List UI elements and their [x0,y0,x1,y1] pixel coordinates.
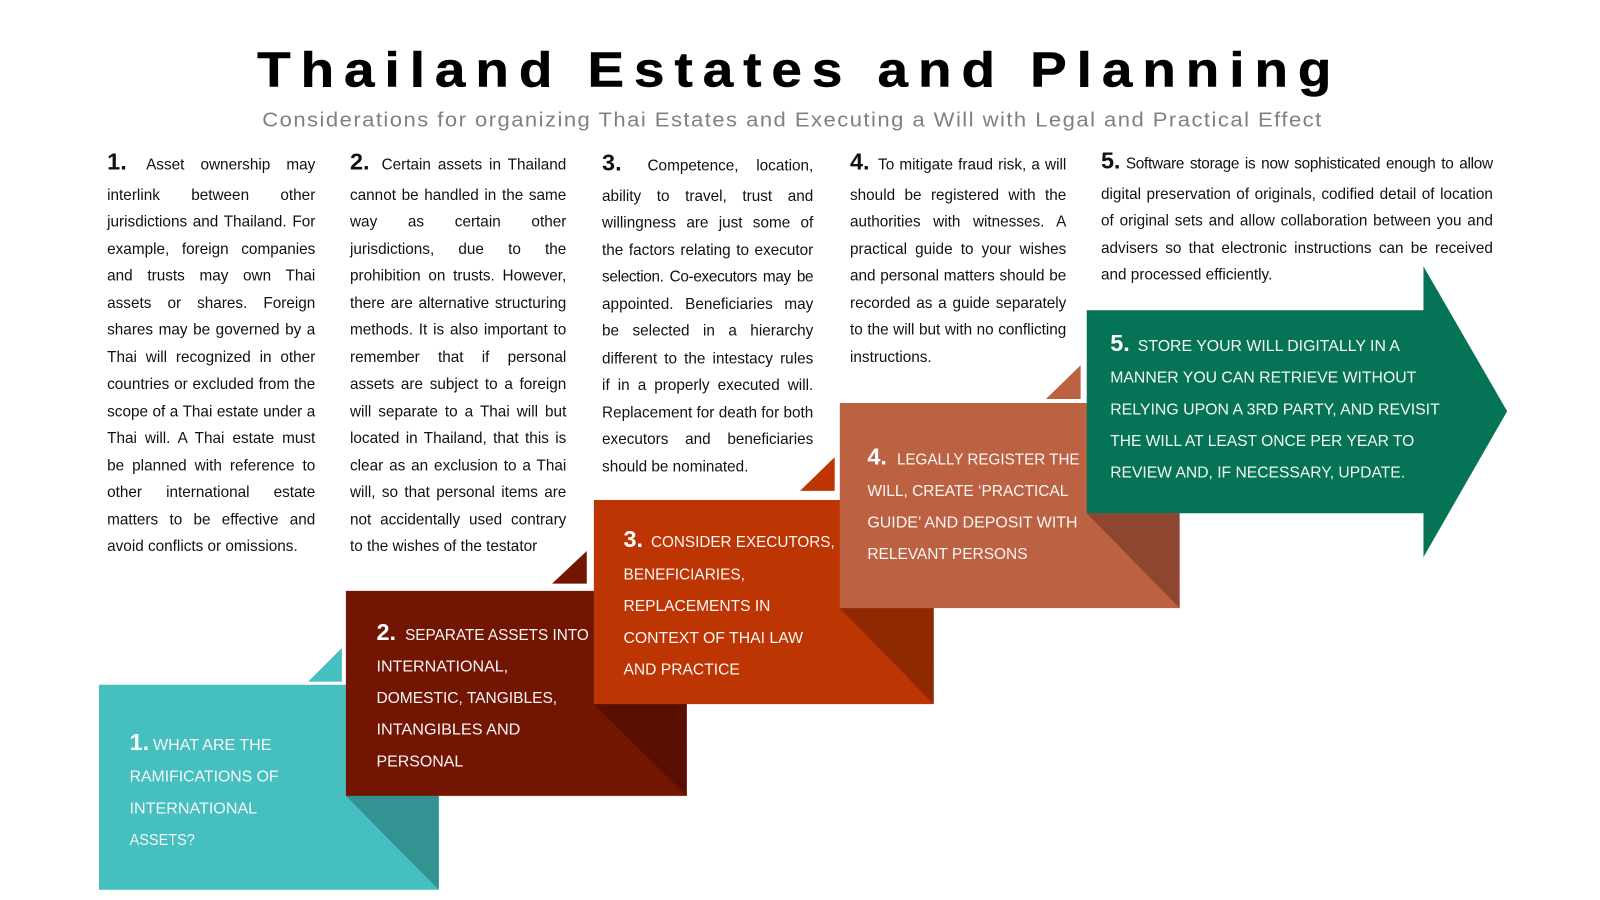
text block: column 3: willingness are just some of [602,214,813,232]
text block: column 1: scope of a Thai estate under a [107,403,315,420]
text block: column 3: selection. Co-executors may be [602,268,813,286]
panel: step 5 arrow: THE WILL AT LEAST ONCE PER YEAR TO [1110,433,1414,450]
text block: column 3: be selected in a hierarchy [602,322,813,340]
panel: step 2 [346,551,687,796]
text block: column 4: authorities with witnesses. A [850,213,1066,231]
text block: column 5: advisers so that electronic instructions can be received [1101,240,1493,257]
panel: step 3: 3. [623,526,643,552]
panel: step 5 arrow: MANNER YOU CAN RETRIEVE WITHOUT [1110,370,1417,387]
text block: column 2 [350,148,566,555]
text block: column 4: instructions. [850,349,932,366]
text block: column 3: appointed. Beneficiaries may [602,296,813,313]
text block: column 4: and personal matters should be [850,267,1066,285]
text block: column 4: recorded as a guide separately [850,295,1066,312]
text block: column 4: should be registered with the [850,187,1066,204]
panel: step 4: 4. [867,443,887,469]
panel: step 2: PERSONAL [377,753,463,770]
text block: column 1: countries or excluded from the [107,376,315,393]
text block: column 4: 4. To mitigate fraud risk, a will [850,148,1066,174]
text block: column 3: ability to travel, trust and [602,188,813,205]
panel: step 1: ASSETS? [130,832,195,849]
text block: column 5: and processed efficiently. [1101,266,1272,284]
text block: column 1: matters to be effective and [107,511,315,529]
text block: column 3: 3. Competence, location, [602,149,813,176]
text block: column 1 [106,148,316,555]
panel: step 2: DOMESTIC, TANGIBLES, [377,690,557,707]
panel: step 4: WILL, CREATE ‘PRACTICAL [867,483,1069,500]
text block: column 2: jurisdictions, due to the [350,241,566,258]
panel: step 5 arrow: RELYING UPON A 3RD PARTY, AND REVISIT [1110,401,1440,418]
panel: step 2: INTANGIBLES AND [377,722,520,739]
text block: column 1: other international estate [107,484,315,501]
panel: step 4 [840,365,1180,608]
panel: step 2: SEPARATE ASSETS INTO [405,627,589,644]
panel: step 4: GUIDE’ AND DEPOSIT WITH [867,515,1078,532]
text block: column 1: 1. Asset ownership may [107,148,315,174]
panel: step 1: RAMIFICATIONS OF [130,769,279,786]
panel: step 3: BENEFICIARIES, [623,567,745,584]
text block: column 5: digital preservation of originals, codified detail of location [1101,186,1493,203]
panel: step 5 arrow: REVIEW AND, IF NECESSARY, UPDATE. [1110,465,1405,482]
panel: step 1: 1. [130,729,149,755]
panel: step 3: CONTEXT OF THAI LAW [623,630,803,647]
text block: column 2: cannot be handled in the same [350,187,566,204]
panel: step 3: REPLACEMENTS IN [623,598,770,615]
text block: column 1: and trusts may own Thai [107,267,315,285]
panel: step 3: AND PRACTICE [623,661,740,678]
panel: step 4: RELEVANT PERSONS [867,546,1028,563]
text block: column 1: example, foreign companies [107,241,315,258]
text block: column 1: shares may be governed by a [107,321,315,339]
text block: column 1: avoid conflicts or omissions. [107,538,298,555]
panel: step 3 [594,457,934,704]
text block: column 2: prohibition on trusts. However, [350,267,566,285]
text block: column 2: remember that if personal [350,349,566,366]
text block: column 2: located in Thailand, that this is [350,430,566,447]
panel: step 2: INTERNATIONAL, [377,658,508,675]
text block: column 2: will separate to a Thai will but [350,403,566,420]
text block: column 1: Thai will. A Thai estate must [107,430,315,447]
text block: column 1: interlink between other [107,187,315,204]
text block: column 2: not accidentally used contrary [350,511,566,529]
text block: column 3 [602,149,814,476]
text block: column 3: the factors relating to executor [602,242,813,259]
text block: column 5: 5. Software storage is now sophisticated enough to allow [1101,147,1493,173]
text block: column 2: to the wishes of the testator [350,538,537,555]
text block: column 2: clear as an exclusion to a Thai [350,457,566,474]
text block: column 2: there are alternative structuring [350,295,566,312]
panel: step 4: LEGALLY REGISTER THE [897,451,1080,468]
title: Thailand Estates and Planning [257,43,1331,98]
text block: column 2: assets are subject to a foreign [350,376,566,393]
text block: column 5: of original sets and allow collaboration between you and [1101,212,1493,230]
text block: column 3: different to the intestacy rules [602,350,813,367]
panel: step 3: CONSIDER EXECUTORS, [651,534,835,551]
panel: step 5 arrow [1087,266,1507,557]
text block: column 2: will, so that personal items are [350,484,566,501]
panel: step 1: WHAT ARE THE [153,737,271,754]
subtitle: Considerations for organizing Thai Estates and Executing a Will with Legal and Practical Effect [262,108,1321,131]
text block: column 4: practical guide to your wishes [850,241,1066,258]
panel: step 1 [99,648,439,890]
text block: column 4 [850,148,1066,366]
text block: column 3: if in a properly executed will. [602,377,813,394]
text block: column 2: methods. It is also important to [350,321,566,339]
text block: column 5 [1101,147,1494,284]
panel: step 5 arrow: STORE YOUR WILL DIGITALLY IN A [1138,338,1400,355]
text block: column 1: jurisdictions and Thailand. For [107,213,315,231]
text block: column 3: should be nominated. [602,458,748,476]
text block: column 1: assets or shares. Foreign [107,295,315,312]
text block: column 2: 2. Certain assets in Thailand [350,148,566,174]
text block: column 3: executors and beneficiaries [602,431,813,448]
panel: step 2: 2. [377,619,396,645]
text block: column 3: Replacement for death for both [602,404,813,421]
text block: column 2: way as certain other [350,213,566,231]
text block: column 1: Thai will recognized in other [107,349,315,366]
text block: column 1: be planned with reference to [107,457,315,474]
panel: step 5 arrow: 5. [1110,330,1130,356]
text block: column 4: to the will but with no conflicting [850,321,1066,339]
panel: step 1: INTERNATIONAL [130,800,257,817]
